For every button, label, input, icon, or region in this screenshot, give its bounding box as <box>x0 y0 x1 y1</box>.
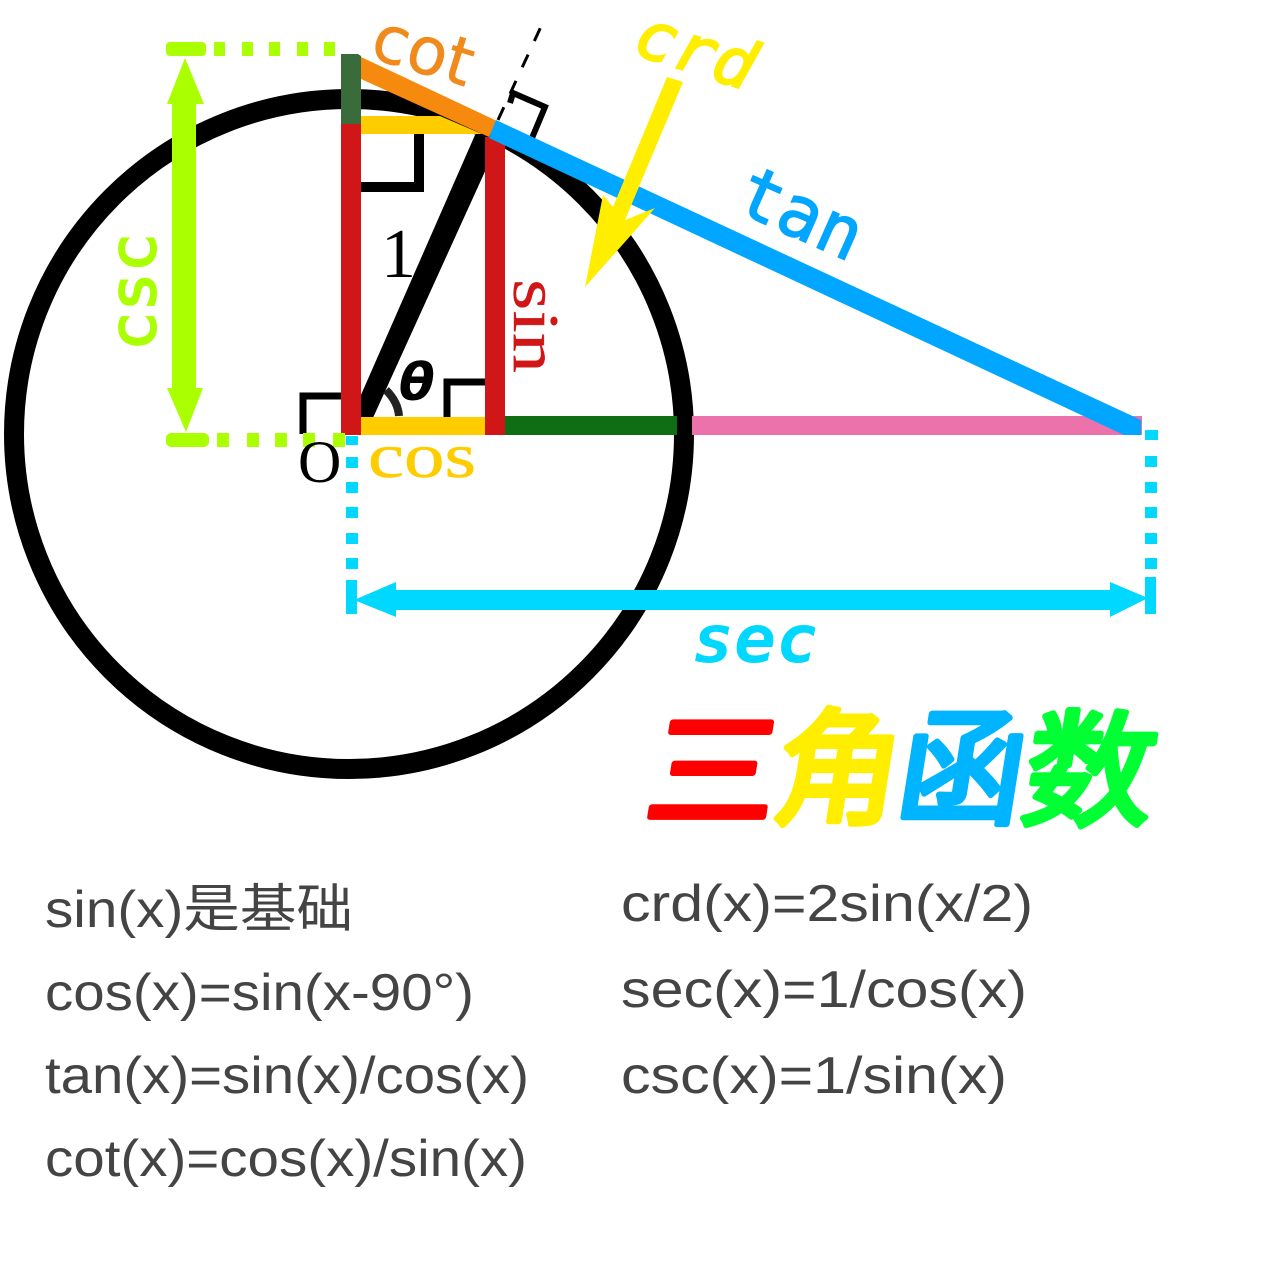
versine segment <box>505 416 677 435</box>
sin segment left <box>341 124 361 435</box>
radius line <box>350 135 487 420</box>
coversine segment <box>341 54 361 124</box>
title char 2: 角 <box>763 668 918 851</box>
title char 1: 三 <box>636 671 795 853</box>
cos bottom segment <box>361 417 485 435</box>
formula tan: tan(x)=sin(x)/cos(x) <box>45 1047 529 1105</box>
right angle at tangent <box>510 93 545 138</box>
formulas left column <box>45 881 529 1188</box>
title char 3: 函 <box>887 668 1042 851</box>
origin label: O <box>298 429 341 495</box>
title <box>636 668 1172 853</box>
cot label: cot <box>363 0 483 102</box>
radius label 1: 1 <box>381 216 416 293</box>
csc guide bottom <box>166 433 345 447</box>
csc label: csc <box>97 233 171 351</box>
csc arrow <box>167 58 204 432</box>
cos top segment <box>361 116 482 134</box>
sec guide right <box>1145 430 1158 614</box>
cos label: cos <box>368 420 476 491</box>
angle arc <box>386 390 399 416</box>
dashed radius extension <box>498 20 544 120</box>
formula cos: cos(x)=sin(x-90°) <box>45 964 474 1022</box>
sin label: sin <box>499 279 572 373</box>
right angle left of origin <box>303 396 342 434</box>
sec arrow <box>354 582 1148 617</box>
tan segment <box>489 120 1141 435</box>
formula csc: csc(x)=1/sin(x) <box>621 1047 1007 1105</box>
sec label: sec <box>692 601 818 678</box>
formula cot: cot(x)=cos(x)/sin(x) <box>45 1130 527 1188</box>
formula sin: sin(x)是基础 <box>45 881 353 939</box>
tan label: tan <box>726 149 877 278</box>
cot segment <box>361 57 497 137</box>
crd arrow <box>585 77 683 287</box>
right angle top <box>360 132 419 187</box>
formula crd: crd(x)=2sin(x/2) <box>621 875 1033 933</box>
title char 4: 数 <box>1012 671 1172 853</box>
formulas right column <box>621 875 1033 1105</box>
sec guide left <box>346 436 358 614</box>
formula sec: sec(x)=1/cos(x) <box>621 961 1027 1019</box>
sin segment right <box>485 137 505 435</box>
sec excess segment <box>692 416 1142 435</box>
right angle at cos <box>447 382 486 417</box>
csc guide top <box>166 42 335 56</box>
theta label: θ <box>399 353 435 413</box>
unit circle <box>14 99 684 769</box>
